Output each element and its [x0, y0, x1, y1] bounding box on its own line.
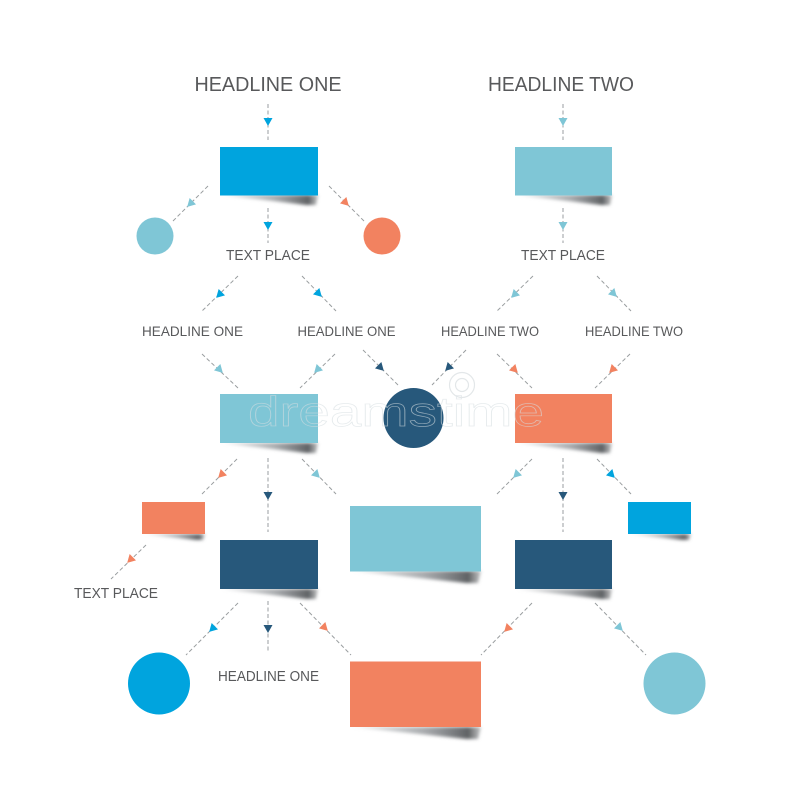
arrow: middle right to small blue — [597, 459, 631, 494]
arrow: middle right to big light box — [497, 459, 532, 494]
arrow: headline to middle right box a — [497, 354, 532, 388]
heading: headline two: HEADLINE TWO — [488, 74, 634, 96]
icon: light blue circle large — [644, 652, 706, 714]
arrow: to orange circle — [329, 186, 365, 222]
arrow: dark left to big orange — [300, 603, 351, 655]
arrow: text to headline two b — [597, 276, 631, 311]
arrow: dark left to blue circle — [186, 603, 238, 655]
arrow: top right box to text — [558, 208, 568, 243]
arrow: middle left to small orange — [202, 459, 237, 494]
text: text place lower: TEXT PLACE — [74, 586, 158, 602]
box: top left blue — [220, 147, 318, 205]
label: headline two a: HEADLINE TWO — [441, 323, 539, 339]
box: big orange — [350, 662, 481, 739]
arrow: to light circle — [172, 186, 208, 222]
arrow: middle left to dark box — [264, 458, 272, 532]
text: headline one lower: HEADLINE ONE — [218, 669, 319, 685]
icon: orange circle — [364, 218, 400, 254]
box: small orange — [142, 502, 205, 540]
watermark — [248, 372, 544, 435]
box: dark right — [515, 540, 612, 599]
heading: headline one: HEADLINE ONE — [194, 74, 342, 96]
icon: light blue circle — [136, 218, 174, 254]
arrow: text to headline two a — [497, 276, 533, 311]
box: small blue — [628, 502, 691, 540]
arrow: headline to dark circle a — [363, 350, 398, 385]
arrow: headline one to top box — [264, 104, 272, 140]
arrow: dark right to light circle — [595, 603, 646, 655]
box: middle right orange — [515, 394, 612, 453]
arrow: dark right to big orange — [481, 603, 532, 655]
arrow: small orange to text place — [111, 545, 146, 579]
arrow: headline to middle left box b — [300, 354, 335, 388]
label: headline one a: HEADLINE ONE — [142, 323, 243, 339]
box: top right light blue — [515, 147, 612, 205]
arrow: text to headline one b — [302, 276, 336, 311]
arrow: middle left to big light box — [302, 459, 336, 494]
text: text place left: TEXT PLACE — [226, 248, 310, 264]
text: text place right: TEXT PLACE — [521, 248, 605, 264]
box: middle left light blue — [220, 394, 318, 453]
arrow: text to headline one a — [202, 276, 238, 311]
icon: blue circle — [128, 652, 190, 714]
arrow: middle right to dark box — [558, 458, 568, 532]
box: big light blue — [350, 506, 481, 583]
box: dark left — [220, 540, 318, 599]
arrow: headline two to top box — [558, 104, 568, 140]
arrow: headline to dark circle b — [432, 350, 466, 385]
watermark: dreamstime — [248, 388, 544, 435]
arrow: headline to middle left box a — [202, 354, 238, 388]
icon: dark circle — [384, 388, 444, 448]
label: headline two b: HEADLINE TWO — [585, 323, 683, 339]
arrow: top left box to text — [264, 208, 272, 243]
arrow: dark left to headline — [264, 601, 272, 653]
label: headline one b: HEADLINE ONE — [298, 323, 396, 339]
arrow: headline to middle right box b — [595, 354, 630, 388]
